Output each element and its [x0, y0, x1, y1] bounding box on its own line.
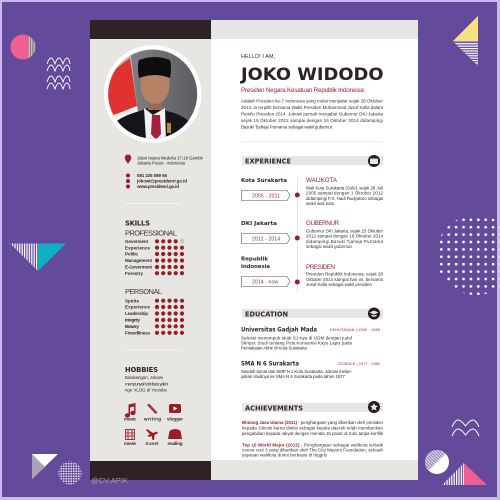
- education: university: Universitas Gadjah Mada: [241, 328, 317, 334]
- skills: professional: Forestry: [125, 271, 143, 276]
- contact details: Jalan Istana Medeka 17-18 Gambir: [137, 156, 204, 160]
- skills: professional: [125, 228, 184, 276]
- experience: Republik Indonesia: PRESIDEN: [306, 264, 335, 271]
- intro paragraph: 2014, ia terpilih bersama Wakil Presiden Muhammad Jusuf Kalla dalam: [241, 105, 383, 110]
- divider: [241, 140, 383, 143]
- education: high school: SMA N 6 Surakarta: [241, 362, 299, 368]
- decoration: waves left: [47, 58, 70, 89]
- intro paragraph: sejak 15 Oktober 2012 sampai dengan 16 Oktober 2014 didampingi: [241, 118, 383, 123]
- decoration: waves right: [452, 420, 479, 436]
- contact details: 081 226 089 66: [137, 173, 167, 178]
- experience: DKI Jakarta: DKI Jakarta: [241, 221, 277, 227]
- intro paragraph: Pemilu Presiden 2014. Jokowi pernah menjabat Gubernur DKI Jakarta: [241, 112, 384, 116]
- skills: personal: Leadership: [125, 311, 148, 316]
- achievements header: [242, 401, 383, 413]
- experience: DKI Jakarta: [241, 220, 384, 249]
- hobbies icons: vlogger: [167, 416, 183, 422]
- experience: Kota Surakarta: Wali Kota Surakarta (Solo), sejak 28 Juli: [306, 186, 383, 190]
- education: high school: Setelah tamat dari SMP N 1 Kota Surakarta, Jokowi melan-: [241, 369, 353, 374]
- hobbies text: mempunyai hobi baru yakni: [125, 382, 168, 386]
- contact details: www.presidenri.go.id: [136, 184, 179, 189]
- education: high school: SCIENCE | 1977 - 1980: [338, 362, 380, 366]
- contact details: jokowi@presidenri.go.id: [136, 178, 187, 184]
- achievements header: ACHIEVEMENTS: [245, 404, 303, 412]
- resume card: [90, 20, 418, 480]
- achievement: Top 10 World Major: Top 10 World Major (2012) - Penghargaan sebagai walikota terbaik: [242, 442, 384, 447]
- skills: personal: Spirite: [125, 298, 139, 303]
- sidebar divider: [125, 348, 181, 351]
- decoration: teal triangle: [10, 244, 66, 271]
- experience: Kota Surakarta: Kota Surakarta: [241, 178, 287, 184]
- skills: personal: Experience: [125, 305, 150, 310]
- skills: personal: PERSONAL: [125, 287, 162, 296]
- skills: personal: [125, 287, 184, 336]
- skills: professional: Experience: [125, 245, 150, 250]
- decoration: halftone circle: [58, 462, 82, 484]
- icon: vlogger: [169, 404, 181, 413]
- skills: personal: Friendliness: [125, 330, 150, 336]
- decoration: pink striped triangle: [442, 463, 487, 485]
- achievement: Bintang Jasa Utama: pengabdian kepada rakyat dengan menata 15 pasar di Solo tanpa konflik: [242, 431, 384, 436]
- education: university: Skripsi: Studi tentang Pola Konsumsi Kayu Lapis pada: [241, 340, 353, 346]
- experience: DKI Jakarta: GUBERNUR: [306, 220, 339, 227]
- experience: Republik Indonesia: Presiden Republik Indonesia, sejak 28: [306, 272, 384, 276]
- skills: professional: Management: [125, 258, 152, 263]
- intro paragraph: Adalah Presiden ke-7 Indonesia yang mulai menjabat sejak 28 Oktober: [241, 98, 384, 104]
- experience: Kota Surakarta: didampingi F.X. Hadi Rudyatmo sebagai: [306, 196, 383, 201]
- skills: personal: Bravery: [125, 324, 139, 329]
- experience: DKI Jakarta: 2012 - 2014: [252, 236, 280, 242]
- decoration: white striped circle: [425, 450, 449, 474]
- experience: DKI Jakarta: Gubernur DKI Jakarta, sejak 15 Oktober: [306, 228, 384, 233]
- experience: Kota Surakarta: wakil wali kota: [306, 201, 335, 206]
- icon: writing: [147, 404, 158, 414]
- experience: Republik Indonesia: Indonesia: [241, 264, 270, 270]
- education: high school: jutkan studinya ke SMA N 6 Surakarta pada tahun 1977: [240, 374, 346, 379]
- decoration: white and dotted triangle: [32, 454, 58, 479]
- experience: Republik Indonesia: [241, 256, 384, 287]
- icon: travel: [146, 429, 158, 440]
- icon: graduation cap: [370, 310, 378, 317]
- hobbies text: Belakangan, Jokowi: [125, 375, 163, 380]
- skills: professional: PROFESSIONAL: [125, 228, 177, 238]
- achievement: Bintang Jasa Utama: Bintang Jasa Utama (2011) - penghargaan yang diberikan oleh presiden: [242, 420, 384, 425]
- icon: movie: [126, 430, 134, 440]
- hobbies text: nge VLOG di Youtube: [125, 388, 168, 392]
- intro heading: HELLO! I AM,: [241, 54, 275, 60]
- icon: star: [370, 403, 378, 411]
- experience: DKI Jakarta: didampingi Basuki Tjahaja Purnama: [306, 239, 384, 244]
- experience: Republik Indonesia: Republik: [241, 256, 268, 262]
- achievement: Top 10 World Major: [242, 442, 384, 458]
- decoration: dotted circle: [436, 215, 500, 295]
- education: university: [241, 328, 380, 351]
- experience: Republik Indonesia: 2014 - now: [252, 280, 278, 286]
- experience: Kota Surakarta: 2005 - 2011: [252, 194, 280, 200]
- education header: [242, 308, 383, 320]
- hobbies text: HOBBIES: [125, 366, 158, 374]
- experience: DKI Jakarta: sebagai wakil gubernur: [306, 244, 353, 249]
- education header: EDUCATION: [245, 310, 288, 318]
- hobbies icons: movie: [124, 441, 136, 446]
- experience: Republik Indonesia: Oktober 2014 sampai hari ini, bersama: [306, 277, 384, 282]
- experience: Kota Surakarta: [241, 177, 384, 206]
- timeline line: [296, 178, 299, 292]
- achievement: Top 10 World Major: nomor urut 3 yang diberikan oleh The City Mayors Foundation, sebuah: [242, 448, 384, 452]
- education: high school: [240, 362, 380, 379]
- watermark: @CV.APIK: [91, 476, 128, 485]
- intro paragraph: [241, 98, 384, 130]
- icon: location pin: [125, 154, 131, 164]
- decoration: yellow striped triangle: [453, 16, 478, 66]
- subtitle: Presiden Negara Kesatuan Republik Indonesia: [241, 87, 364, 94]
- sidebar divider: [125, 202, 181, 205]
- skills: professional: Goverment: [125, 239, 148, 244]
- experience: Kota Surakarta: 2005 sampai dengan 1 Oktober 2012: [306, 190, 384, 196]
- hobbies icons: music: [124, 416, 136, 422]
- icon: music: [125, 403, 136, 418]
- skills heading: SKILLS: [125, 220, 150, 228]
- experience header: EXPERIENCE: [245, 158, 291, 166]
- decoration: pink striped circle: [10, 34, 36, 60]
- intro paragraph: Basuki Tjahaja Purnama sebagai wakil gubernur.: [241, 124, 333, 130]
- education: university: KEHUTANAN | 1980 - 1985: [330, 328, 380, 332]
- hobbies text: [125, 366, 168, 392]
- icon: reading: [168, 429, 182, 439]
- hobbies icons: travel: [146, 441, 158, 446]
- hobbies icons: [124, 403, 183, 446]
- experience header: [242, 155, 383, 167]
- experience: DKI Jakarta: 2012 sampai dengan 16 Oktober 2014: [306, 234, 384, 238]
- skills: professional: E-Goverment: [125, 264, 152, 270]
- achievement: Bintang Jasa Utama: [242, 420, 384, 436]
- name: JOKO WIDODO: [240, 65, 384, 85]
- achievement: Bintang Jasa Utama: kepada Jokowi karna dinilai sebagai kepala daerah telah memberikan: [242, 426, 384, 430]
- education: university: Selesai menempuh studi S1-nya di UGM dengan judul: [241, 335, 352, 340]
- contact details: Jakarta Pusat - Indonesia: [137, 160, 186, 166]
- education: university: Pemakaian Akhir di Kota Surakarta: [241, 346, 308, 351]
- hobbies icons: reading: [168, 441, 183, 446]
- contact details: [125, 154, 204, 189]
- icon: briefcase: [370, 158, 378, 164]
- skills: personal: Integrity: [125, 318, 140, 322]
- experience: Kota Surakarta: WALIKOTA: [306, 177, 338, 184]
- portrait photo: [104, 45, 202, 143]
- hobbies icons: writing: [143, 416, 161, 422]
- achievement: Top 10 World Major: yayasan walikota dunia berbasis di Inggris: [242, 453, 328, 458]
- experience: Republik Indonesia: Jusuf Kalla sebagai wakil presiden: [306, 282, 373, 287]
- skills: professional: Politic: [125, 252, 138, 257]
